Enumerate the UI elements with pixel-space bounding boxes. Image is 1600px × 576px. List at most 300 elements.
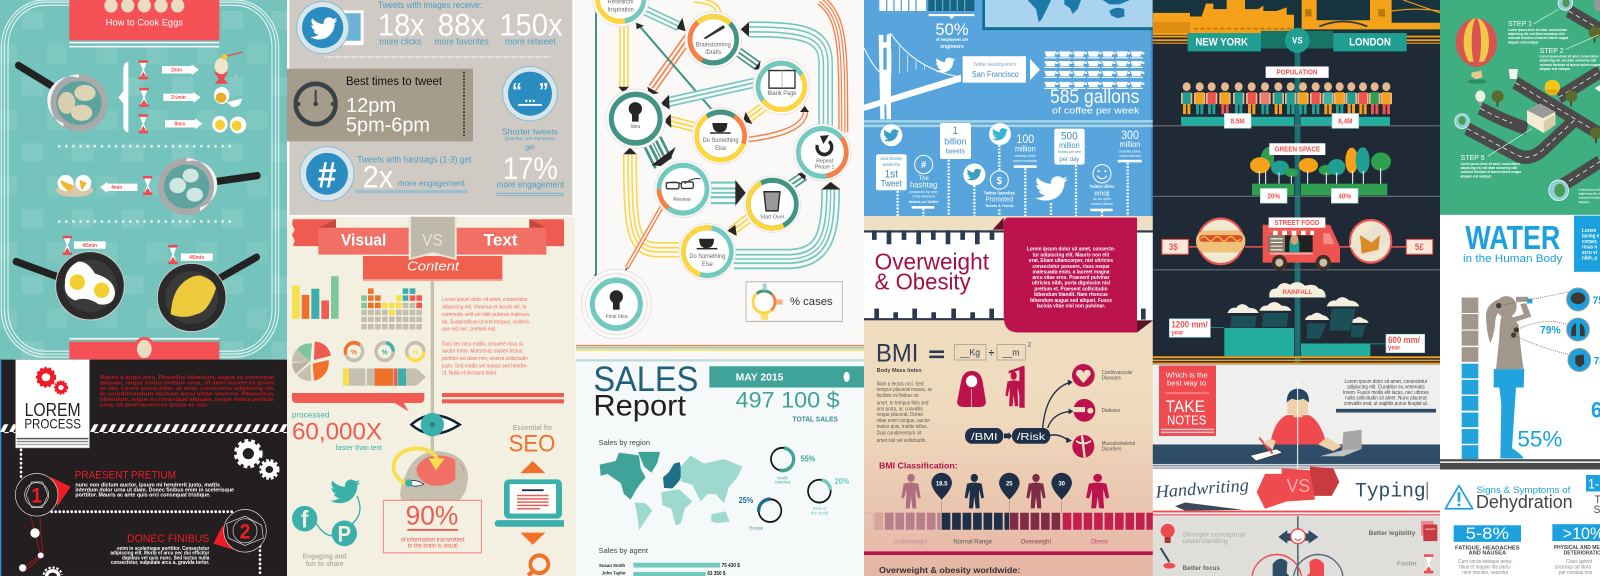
employees chart: engineers — [940, 44, 964, 50]
bmi description: facilisis mi finibus sit — [877, 393, 919, 399]
total sales block: 497 100 $ — [736, 389, 840, 413]
center spine — [1295, 48, 1300, 364]
bmi description: vitae enim congue, auctor — [877, 418, 930, 424]
panel: twitter headquarters — [864, 0, 1157, 216]
icon: building — [1527, 104, 1555, 133]
node: brainstorming: Brainstorming — [696, 42, 731, 48]
text block: convallis erat, ut sagittis purus feugiat ut. — [1344, 401, 1428, 407]
shorter tweets stat: get — [525, 142, 535, 152]
step labels: adipiscing elit, sed diam nonummy nibh — [1461, 166, 1517, 170]
boil timers: 2min — [171, 67, 182, 74]
crimson intro box: Lorem ipsum dolor sit amet, consecte- — [1027, 246, 1116, 253]
classification labels: Normal Range — [953, 538, 992, 546]
card: over 10 percent: sociosqu ad litora — [1555, 564, 1591, 570]
intro text: ac nisi. Lorem ipsum dolor sit amet, consectetur adipiscing elit. — [100, 386, 275, 392]
step labels: euismod tincidunt ut laoreet dolore magna — [1508, 36, 1569, 40]
one billion tweets — [940, 123, 971, 159]
step labels: Lorem ipsum dolor sit amet, consectetuer — [1540, 55, 1600, 59]
column 2: twitter tips and visual vs text — [287, 0, 573, 576]
donut: north america: America — [775, 479, 791, 484]
icon: height measure — [1005, 366, 1025, 408]
poach timer: 4min — [111, 185, 122, 191]
one hundred million: 100 — [1016, 133, 1034, 146]
text block: commodo velit vel nibh pulvinar malesua- — [442, 312, 531, 318]
text block: Lorem ipsum dolor sit amet, consectetur — [442, 297, 528, 303]
text block: que nisl nec, pretium nisl. — [442, 326, 496, 333]
coffee cups: 585 gallons — [1050, 86, 1139, 108]
node: brainstorming — [685, 11, 742, 68]
stat: 90 percent: to the brain is visual — [408, 544, 458, 550]
city header — [1188, 28, 1407, 53]
node: blank page — [753, 58, 810, 115]
step labels: aliquam erat volutpat. — [1540, 67, 1571, 71]
heading banner: How to Cook Eggs — [106, 17, 183, 27]
roads — [1467, 11, 1600, 186]
hashtag: debuts on Twitter — [909, 200, 939, 204]
first tweet — [876, 124, 907, 190]
panel: new york vs london — [1153, 0, 1440, 364]
ribbon heading — [292, 217, 573, 281]
vs hexagons — [1257, 467, 1339, 509]
agent bars — [599, 548, 740, 576]
bmi description: Duis condimentum sit — [877, 430, 922, 437]
ribbon heading: Visual — [341, 231, 386, 250]
employees chart: of employees are — [936, 37, 969, 42]
node: repeat phase: Repeat — [816, 159, 834, 165]
population row: 8,4M — [1338, 118, 1353, 126]
bmi formula — [876, 339, 1032, 374]
intro box: lacing e — [1582, 233, 1600, 240]
promoted tweets: $ — [997, 176, 1002, 187]
panel: overweight and obesity — [864, 216, 1153, 576]
title: in the Human Body — [1463, 254, 1563, 265]
social icons: Engaging and — [303, 553, 347, 561]
icon: speech badge: ” — [539, 80, 549, 104]
stats: 18x — [378, 8, 425, 43]
stat: 60,000x: processed — [292, 410, 329, 420]
step labels: Lorem ipsum dolor sit amet, consectetuer — [1461, 162, 1521, 166]
green space row: 20% — [1267, 193, 1280, 200]
arrowheads — [594, 18, 841, 278]
bmi formula: Body Mass Index — [877, 368, 922, 374]
icon: eye — [411, 413, 460, 436]
benefit list right: Faster — [1397, 560, 1417, 568]
shorter tweets stat: (less than 100 characters) — [505, 136, 555, 141]
green space row: GREEN SPACE — [1275, 146, 1321, 153]
risk labels: Disorders — [1102, 446, 1122, 452]
population row: 8,5M — [1231, 118, 1245, 126]
street food row — [1162, 217, 1433, 270]
seo block: Essential for — [513, 425, 553, 432]
heads diagram — [1252, 554, 1343, 576]
node: do something else — [692, 108, 749, 164]
bar chart — [292, 276, 339, 319]
stat: 90 percent: of information transmitted — [401, 537, 465, 544]
agent bars: John Taylor — [602, 570, 626, 576]
icon: student — [1250, 389, 1362, 461]
icon: scale — [957, 371, 986, 407]
donut: north america — [771, 448, 815, 484]
stat: 60,000x — [292, 410, 382, 452]
skyline — [1153, 0, 1440, 44]
icon: speech badge: ... — [524, 89, 536, 105]
node: final idea: Final Idea — [606, 314, 628, 320]
intro text: aliquam, neque metus pretium urna, sit amet laoreet ex ipsum — [100, 380, 275, 387]
ribbon heading: Content — [407, 259, 460, 274]
step labels: euismod tincidunt ut laoreet dolore magna — [1461, 170, 1521, 174]
benefit list left: Stronger conceptual — [1183, 531, 1245, 538]
hashtag stat: 2x — [363, 160, 393, 195]
bmi risk flow: /BMI — [971, 432, 998, 443]
text block: nulla sollicitudin sit amet. Nunc placerat — [1345, 395, 1427, 402]
icon: pen — [1175, 503, 1243, 511]
best times band — [287, 69, 473, 141]
column 1: eggs and lorem process — [0, 0, 287, 576]
right heading fragment — [1586, 475, 1600, 516]
step labels: aliquam. — [1579, 200, 1590, 204]
intro box: risus n — [1582, 244, 1597, 251]
promoted tweets: Tweets & Trends — [985, 204, 1014, 208]
intro box: arcu vi — [1582, 250, 1598, 256]
panel: lorem process — [0, 360, 287, 576]
stats: more clicks — [379, 36, 421, 47]
crimson intro box — [993, 217, 1153, 332]
boil timers: 3½min — [171, 94, 186, 101]
step 2: dapibus vel quis nunc. Sed luctus nulla — [122, 555, 210, 562]
street food row: 3$ — [1169, 241, 1178, 252]
bmi description: amet nisl vel sollicitudin. — [877, 438, 927, 444]
street food row: 5£ — [1415, 241, 1424, 252]
donut: north america: 55% — [801, 454, 815, 463]
stats: more favorites — [434, 36, 489, 47]
hashtag: proposed by user — [910, 190, 938, 194]
node: do something else: Do Something — [703, 138, 739, 144]
icon: speech badge — [503, 66, 557, 121]
total sales block: TOTAL SALES — [793, 416, 838, 424]
step labels: aliquam erat volutpat. — [1508, 40, 1539, 44]
step labels: STEP 1 — [1508, 19, 1532, 28]
poach timer — [100, 176, 152, 195]
card: 5-8 percent: rient montes, nascetur — [1462, 570, 1509, 576]
shorter tweets stat — [496, 127, 565, 196]
intro box: Lorem — [1582, 228, 1597, 234]
emoji: as an open — [1093, 197, 1111, 201]
employees chart — [879, 0, 974, 50]
donut: rest of world: Rest of — [813, 506, 827, 511]
node: idea: Idea — [630, 124, 640, 130]
stats: Tweets with images receive: — [378, 0, 482, 10]
total sales block — [709, 366, 864, 424]
chain linkage — [19, 516, 62, 576]
benefit list left: understanding — [1183, 538, 1228, 545]
icon: fried egg pan: 4/5min — [82, 243, 97, 249]
social icons: f — [301, 506, 309, 533]
step 1: interdum dolor urna ut diam. Donec finibus enim in scelerisque — [75, 487, 234, 494]
intro text: urna, sit amet laoreet ex ipsum ac nisi. — [100, 402, 209, 409]
hashtag: hashtag — [910, 180, 937, 189]
classification pins — [931, 473, 1072, 513]
three hundred million — [1118, 129, 1142, 162]
icon: speech badge: “ — [512, 80, 522, 104]
callout bar — [292, 393, 424, 411]
text block: porttitor vel diam non, viverra sollicitudin — [442, 356, 528, 362]
stats — [378, 0, 563, 47]
text block: auctor tortor. Maecenas sapien lectus, — [442, 348, 524, 355]
crimson intro box: tur adipiscing elit. Mauris non elit — [1033, 252, 1110, 258]
percent donuts — [345, 343, 424, 360]
first tweet: 1st — [885, 168, 898, 181]
intro box — [1574, 216, 1600, 272]
emoji: source library — [1091, 202, 1113, 206]
step 2 — [110, 510, 266, 566]
node: blank page: Blank Page — [768, 91, 797, 97]
promoted tweets — [984, 171, 1016, 208]
green space row — [1250, 143, 1391, 203]
title: WATER — [1465, 219, 1561, 256]
bmi description: metus quis, mattis tellus. — [877, 424, 928, 430]
benefit list left — [1161, 524, 1245, 572]
legend: % cases — [790, 295, 833, 308]
stat: 90 percent: 90% — [406, 502, 458, 531]
text block — [1343, 379, 1429, 407]
icon: warning triangle — [1445, 486, 1473, 509]
pie chart — [292, 342, 331, 381]
crimson intro box: erat. Etiam ullamcorper, nisl ultricies — [1029, 258, 1113, 264]
level column — [1462, 298, 1478, 459]
donut: rest of world: 20% — [835, 477, 849, 486]
seo block: SEO — [509, 429, 555, 457]
bmi risk flow — [965, 379, 1073, 444]
one billion tweets: billion — [944, 136, 966, 147]
panel: green steps — [1440, 0, 1600, 215]
stats: more retweet — [505, 36, 556, 47]
connecting dots — [21, 450, 260, 574]
three hundred million: million — [1120, 140, 1140, 149]
one hundred million: monthly active — [1015, 154, 1036, 158]
node: repeat phase — [794, 124, 851, 181]
gutter — [564, 0, 576, 576]
icon: food truck — [1263, 225, 1340, 270]
card: over 10 percent: Class aptent — [1566, 559, 1593, 565]
bmi formula: ÷ — [989, 347, 994, 359]
percent donuts: % — [351, 349, 358, 357]
seo block — [495, 425, 573, 575]
boil timers: 8min — [175, 121, 185, 128]
icon: bird bubbles — [963, 123, 1011, 186]
employees chart: 50% — [935, 21, 969, 39]
step labels — [1461, 9, 1600, 204]
card: over 10 percent — [1552, 524, 1600, 576]
node: review — [655, 161, 711, 217]
risk labels: Cardiovascular — [1102, 370, 1133, 376]
best times band: 5pm-6pm — [346, 115, 430, 137]
desk — [1153, 444, 1440, 469]
step labels: STEP 5 — [1461, 153, 1485, 162]
first tweet: sends the — [883, 162, 901, 167]
title card: LOREM — [25, 399, 81, 420]
bmi description: neque placerat. Donec — [877, 412, 924, 418]
icon: large bird — [1035, 176, 1068, 201]
hq label: San Francisco — [972, 69, 1019, 79]
smiley arrows — [1278, 529, 1318, 544]
title card: Which is the — [1166, 370, 1208, 380]
five hundred million: Tweets are sent — [1058, 150, 1081, 154]
rainfall row — [1169, 282, 1425, 356]
ribbon heading: VS — [422, 231, 443, 250]
percent donuts: % — [382, 349, 388, 357]
text block: da. Suspendisse ut erat tempus, sceleris- — [442, 319, 531, 325]
node: start over: Start Over — [760, 214, 785, 221]
benefit list right — [1369, 521, 1437, 573]
first tweet: Jack Dorsey — [880, 156, 903, 161]
bmi formula: __m — [1002, 347, 1019, 358]
population row — [1181, 66, 1392, 128]
bmi description: orci porta, ac convallis — [877, 406, 923, 412]
hatch band — [0, 424, 287, 433]
timeline — [876, 123, 1142, 216]
intro text: bibendum, augue eu consequat aliquam, neque metus pretium — [100, 397, 275, 403]
panel: take notes — [1153, 364, 1440, 471]
floor — [1440, 459, 1600, 469]
street food row: STREET FOOD — [1275, 220, 1320, 227]
benefit list right: Better legibility — [1369, 530, 1416, 537]
card: over 10 percent: >10% — [1563, 525, 1600, 543]
bmi description: tempus placerat massa, ac — [877, 387, 933, 393]
text block: rit. Nulla et tincidunt dolor. — [442, 370, 498, 377]
bmi risk flow: /Risk — [1017, 432, 1046, 443]
world map frame — [984, 0, 1157, 29]
social icons: P — [338, 523, 351, 547]
hashtag stat: Tweets with hashtags (1-3) get — [357, 154, 472, 164]
icon: poached eggs — [56, 175, 93, 197]
step 2: 2 — [240, 521, 250, 544]
classification labels — [894, 538, 1109, 546]
hashtag: # — [921, 160, 927, 171]
donut: north america: North — [777, 475, 788, 480]
node: final idea — [581, 269, 651, 339]
donut: rest of world — [808, 477, 849, 515]
connectors — [596, 0, 843, 276]
handwriting title: Handwriting — [1154, 475, 1249, 502]
typing title: Typing — [1355, 480, 1426, 503]
icon: scrambled egg pan: 4/5min — [189, 255, 204, 261]
node: repeat phase: Phase 1 — [815, 164, 834, 171]
icon: boiling pan — [18, 65, 108, 132]
step labels: euismod tincidunt ut laoreet dolore magna — [1540, 63, 1600, 67]
icon: twitter badge with images — [297, 1, 364, 54]
one billion tweets: 1 — [953, 125, 958, 137]
classification scale — [864, 513, 1153, 530]
step 1: 1 — [31, 485, 42, 508]
step 2: consectetur, vulputate arcu a, gravida tortor. — [111, 560, 210, 566]
bottom stripes — [1153, 356, 1440, 364]
tile chart — [361, 288, 422, 330]
rainfall row: year — [1388, 344, 1401, 352]
panel: comparison — [1153, 516, 1440, 576]
title tag — [864, 230, 1153, 320]
five hundred million — [1054, 129, 1085, 165]
shorter tweets stat: more engagement — [496, 179, 565, 190]
classification labels: Overweight — [1021, 538, 1051, 546]
card: 5-8 percent: tibus et magnis dis partu- — [1459, 564, 1512, 570]
crimson intro box: consectetur posuere, risus neque — [1032, 264, 1110, 270]
text block: adipiscing elit. Curabitur eu venenatis — [1347, 384, 1425, 391]
stat: 90 percent — [383, 500, 481, 553]
text block: adipiscing elit. Vivamus et iaculis elit. In — [442, 304, 527, 311]
first tweet: Tweet — [881, 178, 903, 189]
heading banner — [69, 0, 219, 47]
hashtag stat: more engagement — [398, 179, 466, 188]
classification labels: Obese — [1091, 538, 1109, 546]
icon: boiled egg results — [212, 52, 246, 133]
step 1: nunc non dictum auctor, ipsum mi hendrerit justo, mattis — [75, 483, 220, 489]
step labels: adipiscing elit, sed diam nonummy nibh — [1540, 59, 1596, 63]
intro text: Mauris a turpis arcu. Phasellus bibendum, augue eu consequat — [100, 375, 274, 381]
title card: TAKE — [1166, 399, 1205, 416]
row dividers — [1153, 125, 1440, 270]
donut: europe — [739, 496, 781, 530]
title tag: & Obesity — [875, 269, 971, 295]
card: 5-8 percent: FATIGUE, HEADACHES — [1455, 545, 1520, 552]
classification pins: 18.5 — [936, 480, 948, 488]
text block — [441, 297, 531, 377]
column 4: twitter facts and overweight — [864, 0, 1157, 576]
step labels: adipiscing elit, sed diam nonummy nibh — [1508, 32, 1565, 36]
intro box: corper, — [1582, 239, 1598, 245]
crimson intro box: bibendum blandit. Nam rhoncus — [1034, 292, 1108, 298]
title card — [16, 360, 89, 448]
stat: water percent: 55% — [1517, 428, 1562, 452]
card: 5-8 percent: AND NAUSEA — [1469, 550, 1506, 557]
title card — [1159, 366, 1216, 436]
rainfall row: 1200 mm/ — [1171, 319, 1208, 330]
hashtag stat — [355, 154, 472, 195]
node: research and inspiration — [592, 0, 649, 26]
body organ callouts: 79% — [1540, 324, 1561, 337]
bmi formula: 2 — [1028, 342, 1032, 348]
stats: 88x — [438, 8, 485, 43]
hashtag — [909, 155, 939, 209]
step 1: PRAESENT PRETIUM — [75, 470, 176, 481]
coffee cups: of coffee per week — [1052, 105, 1140, 116]
text block: justo. Sed mattis vel massa sed hendre- — [441, 363, 528, 369]
donut: europe: Europe — [749, 525, 764, 530]
card: 5-8 percent: 5-8% — [1466, 526, 1509, 543]
body organ callouts — [1496, 288, 1600, 423]
five hundred million: per day — [1059, 156, 1080, 163]
node: brainstorming: /Drafts — [705, 50, 722, 56]
text block: Duis nec arcu mattis, posuere risus ut, — [442, 341, 524, 348]
panel: water in the human body — [1440, 215, 1600, 472]
step 2: DONEC FINIBUS — [127, 533, 210, 545]
icon: hot air balloon — [1456, 18, 1497, 84]
three hundred million: 300 — [1121, 129, 1139, 142]
center axis — [1296, 380, 1299, 470]
icon: scrambled egg pan — [157, 245, 257, 332]
one hundred million — [1013, 133, 1037, 168]
five hundred million: million — [1059, 141, 1080, 150]
node: do something else 2: Else — [702, 262, 713, 268]
one billion tweets: tweets — [946, 148, 965, 156]
title: SALES — [593, 360, 698, 400]
social icons — [292, 480, 360, 568]
bottom stripes — [576, 345, 864, 351]
node: do something else 2: Do Something — [689, 254, 725, 260]
crimson intro box: bibendum augue sed aliquet. Fusce — [1030, 298, 1112, 304]
ribbon heading: Text — [484, 231, 518, 250]
donut: rest of world: the world — [811, 510, 829, 515]
white gutter — [287, 0, 573, 217]
